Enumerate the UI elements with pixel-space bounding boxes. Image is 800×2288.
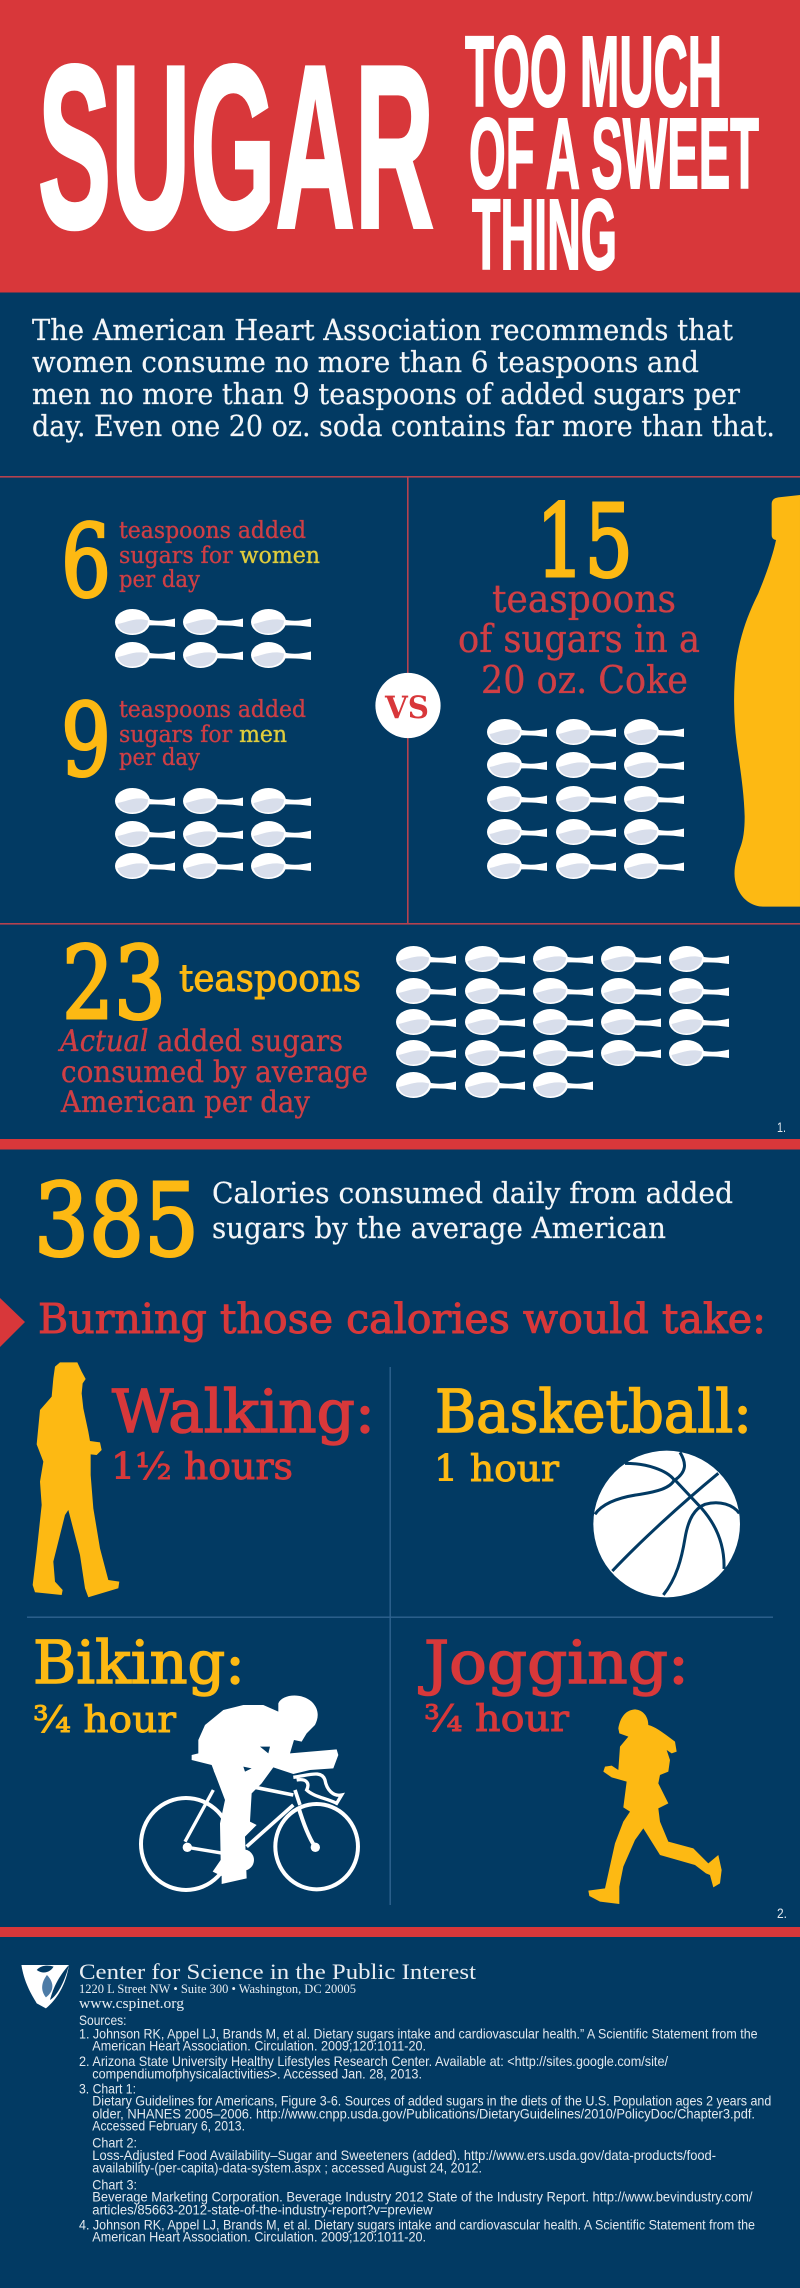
heading: jogging: Jogging:: [419, 1628, 689, 1697]
coke label: teaspoons: [492, 577, 676, 621]
vs badge: VS: [384, 690, 429, 726]
sources list: Accessed February 6, 2013.: [92, 2118, 245, 2134]
panel: 385 calories: [34, 1162, 733, 1279]
heading: biking: Biking:: [33, 1628, 245, 1697]
men label: sugars for men: [119, 722, 287, 748]
sources list: American Heart Association. Circulation. 2009;120:1011-20.: [92, 2038, 426, 2054]
label: actual added sugars: consumed by average: [61, 1055, 368, 1090]
sources list: 3. Chart 1:: [79, 2080, 136, 2096]
coke label: of sugars in a: [458, 617, 700, 661]
men label: teaspoons added: [119, 697, 306, 723]
organization address: 1220 L Street NW • Suite 300 • Washington, DC 20005: [79, 1981, 356, 1996]
footnote 2: 2.: [777, 1905, 787, 1921]
heading: basketball: Basketball:: [435, 1377, 752, 1446]
vs badge: [375, 673, 441, 738]
spoons: 15 teaspoons: [487, 719, 684, 879]
sources list: Chart 2:: [92, 2135, 137, 2151]
intro paragraph: [32, 313, 775, 443]
sources list: older, NHANES 2005–2006. http://www.cnpp.usda.gov/Publications/DietaryGuidelines/2010/PolicyDoc/Chapter3.pdf.: [92, 2105, 755, 2121]
spoons: 23 teaspoons: [396, 946, 729, 1098]
sources list: American Heart Association. Circulation. 2009;120:1011-20.: [92, 2229, 426, 2245]
sources list: compendiumofphysicalactivities>. Accessed Jan. 28, 2013.: [92, 2065, 422, 2081]
men label: [119, 697, 306, 771]
subtitle: Too much of a sweet thing: [465, 16, 759, 291]
women label: per day: [119, 567, 200, 593]
number 23: 23: [62, 925, 166, 1042]
icon: jogger: [588, 1709, 722, 1904]
label: actual added sugars: [57, 1024, 368, 1120]
coke label: 20 oz. Coke: [481, 658, 688, 702]
spoons: 6 teaspoons: [115, 609, 311, 668]
arrow marker: [0, 1298, 25, 1347]
duration: jogging: ¾ hour: [424, 1699, 570, 1740]
men label: per day: [119, 745, 200, 771]
sources list: 2. Arizona State University Healthy Lifestyles Research Center. Available at: <http://sites.google.com/site/: [79, 2053, 668, 2069]
number 385: 385: [34, 1162, 199, 1279]
number 9: 9: [61, 682, 111, 799]
intro paragraph: men no more than 9 teaspoons of added sugars per: [32, 377, 740, 411]
organization name: Center for Science in the Public Interest: [79, 1959, 476, 1984]
label: actual added sugars: Actual added sugars: [57, 1024, 343, 1059]
panel: organization footer: [21, 1959, 476, 2012]
duration: walking: 1½ hours: [111, 1447, 293, 1488]
header banner: [0, 0, 800, 292]
intro paragraph: women consume no more than 6 teaspoons and: [32, 345, 699, 379]
panel: basketball: [434, 1377, 752, 1597]
heading: walking: Walking:: [112, 1377, 375, 1446]
sources list: availability-(per-capita)-data-system.aspx ; accessed August 24, 2012.: [92, 2159, 482, 2175]
footnote 1: 1.: [777, 1119, 786, 1135]
icon: shield logo: [21, 1965, 69, 2008]
panel: walking: [33, 1362, 375, 1597]
calories text: sugars by the average American: [212, 1211, 666, 1245]
sources list: [79, 2012, 771, 2245]
label: teaspoons: teaspoons: [179, 957, 361, 1000]
spoons: 9 teaspoons: [115, 788, 311, 879]
calories text: [212, 1176, 733, 1245]
icon: cyclist: [141, 1695, 358, 1890]
label: actual added sugars: American per day: [60, 1085, 310, 1120]
panel: men recommendation: [61, 682, 311, 879]
heading: burning calories: Burning those calories would take:: [38, 1295, 766, 1343]
women label: [119, 518, 320, 593]
duration: biking: ¾ hour: [33, 1700, 177, 1741]
panel: actual consumption: [57, 925, 786, 1135]
number 6: 6: [61, 503, 111, 620]
sources list: Sources:: [79, 2012, 126, 2028]
coke label: [458, 577, 700, 702]
duration: basketball: 1 hour: [434, 1449, 560, 1490]
number 15: 15: [536, 483, 633, 600]
sources list: Chart 3:: [92, 2176, 137, 2192]
women label: sugars for women: [119, 543, 320, 569]
subtitle: Too much of a sweet thing: THING: [472, 179, 617, 291]
panel: women recommendation: [61, 503, 320, 668]
panel: 20 oz coke: [458, 483, 800, 907]
icon: basketball: [593, 1451, 740, 1597]
icon: soda bottle: [734, 495, 800, 907]
panel: jogging: [419, 1628, 722, 1904]
panel: biking: [33, 1628, 358, 1890]
organization website: www.cspinet.org: [79, 1996, 185, 2012]
intro paragraph: The American Heart Association recommends that: [32, 313, 733, 347]
women label: teaspoons added: [119, 518, 306, 544]
calories text: Calories consumed daily from added: [212, 1176, 733, 1210]
sources list: Loss-Adjusted Food Availability–Sugar and Sweeteners (added). http://www.ers.usda.gov/data-products/food-: [92, 2147, 716, 2163]
icon: walking person: [33, 1362, 119, 1597]
sources list: articles/85663-2012-state-of-the-industry-report?v=preview: [92, 2201, 433, 2217]
sources list: Beverage Marketing Corporation. Beverage Industry 2012 State of the Industry Report. http://www.bevindustry.com/: [92, 2189, 753, 2205]
